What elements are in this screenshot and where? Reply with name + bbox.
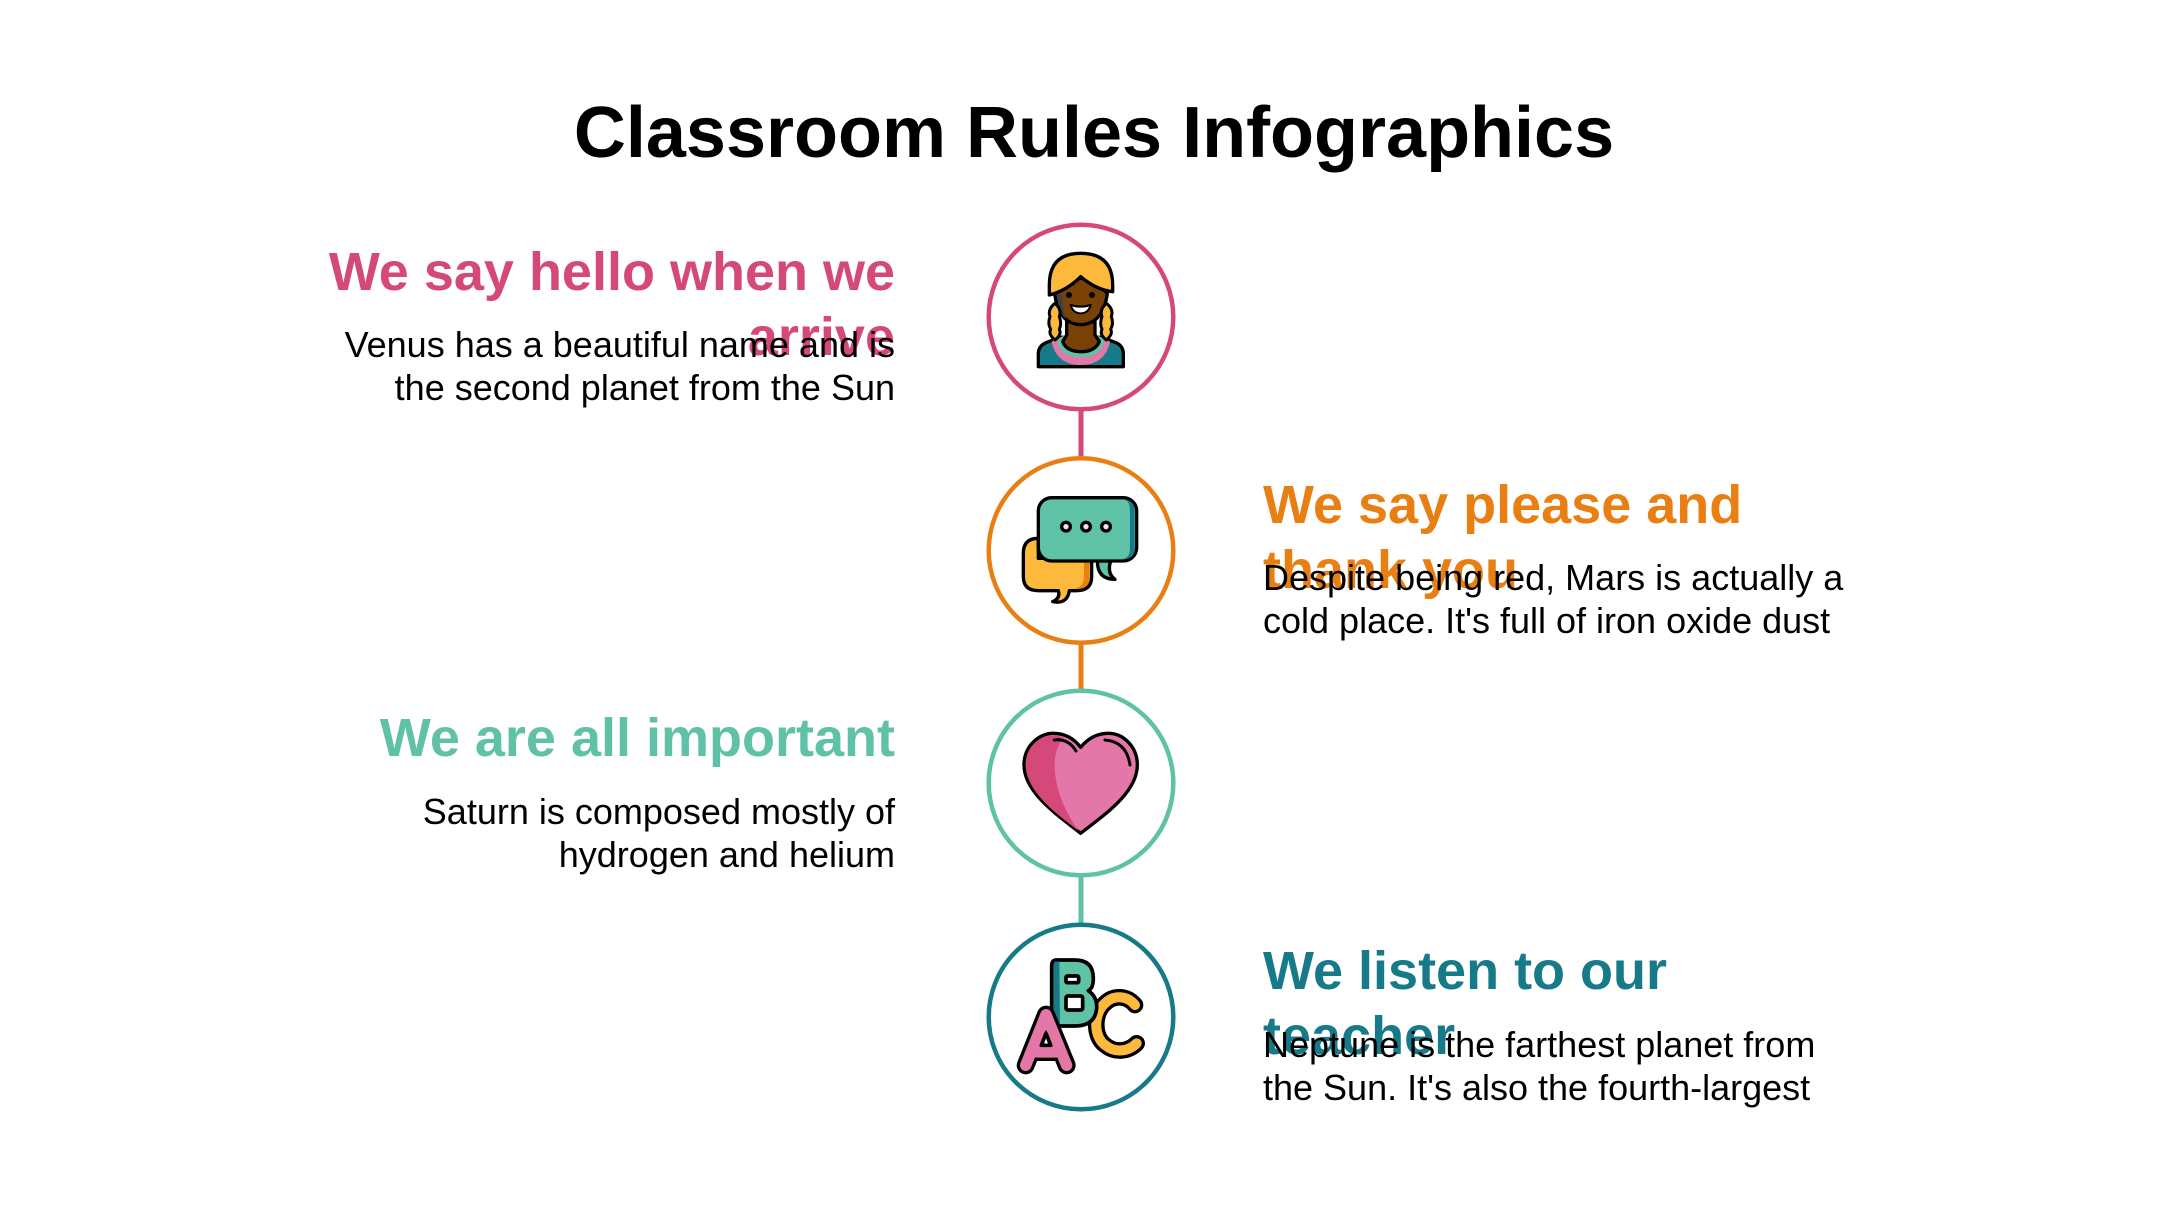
body: rule 2: Despite being red, Mars is actually a xyxy=(1263,557,1843,598)
heading: rule 4: teacher xyxy=(1263,1006,1455,1066)
heading: rule 4: We listen to our xyxy=(1263,941,1667,1001)
heading: rule 4 xyxy=(1263,941,1667,1066)
body: rule 3: hydrogen and helium xyxy=(559,834,895,875)
body: rule 3 xyxy=(423,790,896,875)
icon: ABC letters xyxy=(1026,960,1137,1065)
icon: speech bubbles xyxy=(1023,498,1137,602)
heading: rule 3: We are all important xyxy=(380,708,895,768)
body: rule 1 xyxy=(344,324,895,408)
connector line 3 xyxy=(1078,876,1084,924)
body: rule 1: the second planet from the Sun xyxy=(395,367,895,408)
title: Classroom Rules Infographics xyxy=(574,93,1614,173)
body: rule 2: cold place. It's full of iron oxide dust xyxy=(1263,600,1830,641)
heading: rule 1: arrive xyxy=(748,306,895,366)
body: rule 4 xyxy=(1263,1024,1815,1108)
heading: rule 1 xyxy=(329,242,895,366)
heading: rule 2: thank you xyxy=(1263,540,1518,600)
heading: rule 2: We say please and xyxy=(1263,475,1742,535)
body: rule 1: Venus has a beautiful name and is xyxy=(345,324,895,365)
circle 1 xyxy=(989,225,1173,409)
heading: rule 1: We say hello when we xyxy=(329,242,895,302)
body: rule 2 xyxy=(1263,557,1844,641)
circle 2 xyxy=(989,458,1173,643)
connector line 1 xyxy=(1078,410,1084,458)
heading: rule 2 xyxy=(1263,475,1742,600)
body: rule 3: Saturn is composed mostly of xyxy=(423,790,895,832)
body: rule 4: Neptune is the farthest planet from xyxy=(1263,1024,1815,1064)
body: rule 4: the Sun. It's also the fourth-largest xyxy=(1263,1067,1810,1108)
connector line 2 xyxy=(1078,643,1084,691)
circle 4 xyxy=(989,925,1173,1109)
icon: woman with braids xyxy=(1038,253,1123,367)
icon: heart xyxy=(1024,733,1137,833)
circle 3 xyxy=(989,691,1173,875)
